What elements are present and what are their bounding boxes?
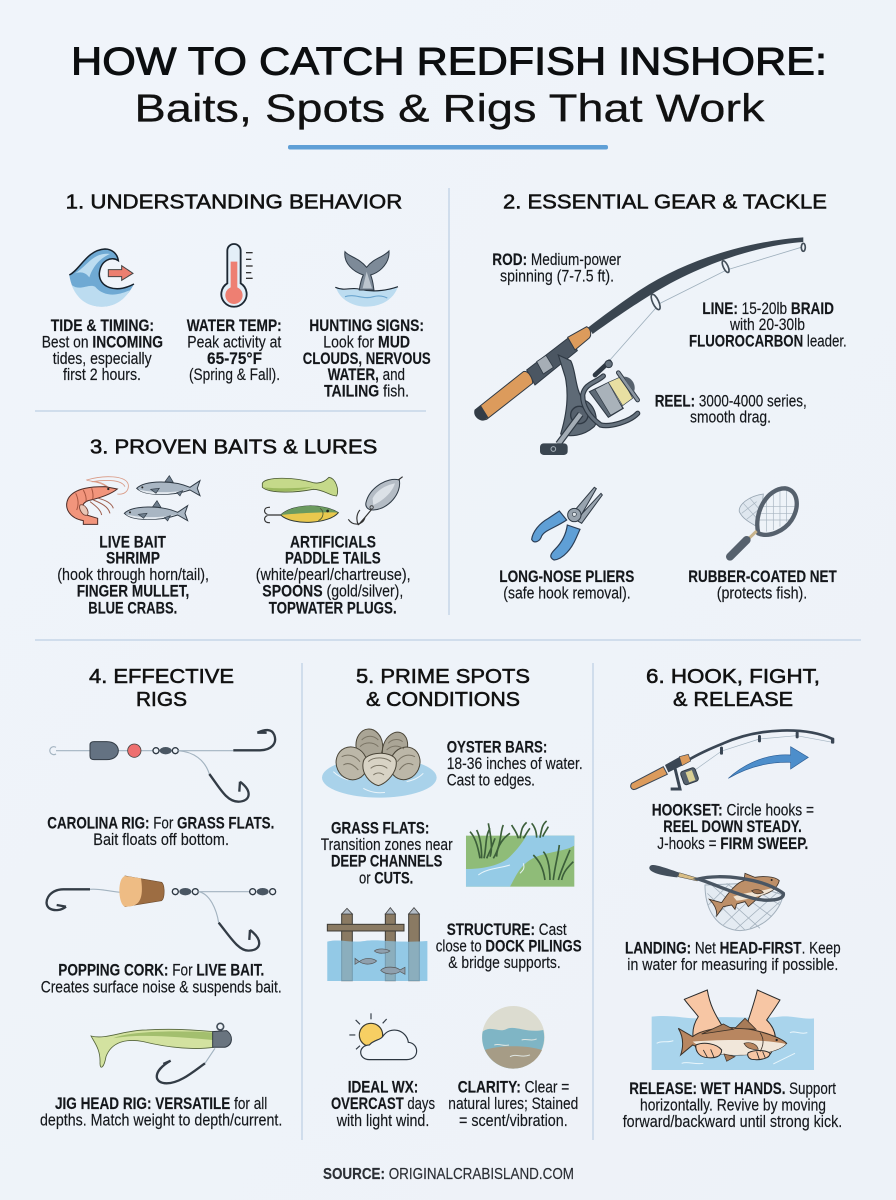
icon: rod and reel xyxy=(475,237,805,455)
icon: water clarity xyxy=(482,1006,545,1069)
icon: jig head rig xyxy=(91,1023,231,1083)
panel: 1 understanding behavior xyxy=(42,191,431,401)
text: jig head rig: JIG HEAD RIG: VERSATILE for all xyxy=(55,1095,267,1113)
text: popping cork: Creates surface noise & suspends bait. xyxy=(41,979,282,997)
text: pliers: (safe hook removal). xyxy=(503,584,631,602)
heading 4 xyxy=(89,666,234,711)
text: ideal wx xyxy=(331,1079,435,1130)
text: hookset: REEL DOWN STEADY. xyxy=(663,818,802,836)
label: line: LINE: 15-20lb BRAID xyxy=(702,300,834,318)
text: hookset: J-hooks = FIRM SWEEP. xyxy=(657,835,808,853)
heading 5: 5. PRIME SPOTS xyxy=(356,666,530,688)
text: water temp: 65-75°F xyxy=(207,350,262,368)
text: water temp: WATER TEMP: xyxy=(187,317,282,335)
icon: tailing fish xyxy=(335,251,398,307)
title: Baits, Spots & Rigs That Work xyxy=(134,88,765,130)
text: clarity: natural lures; Stained xyxy=(448,1095,578,1113)
text: live bait: FINGER MULLET, xyxy=(77,583,189,601)
text: hookset xyxy=(652,802,814,853)
text: ideal wx: IDEAL WX: xyxy=(348,1079,418,1097)
text: hunting signs: WATER, and xyxy=(328,366,405,384)
heading 5 xyxy=(356,666,530,711)
icon: carolina rig xyxy=(50,730,275,802)
text: artificials: PADDLE TAILS xyxy=(285,549,381,567)
text: carolina rig: CAROLINA RIG: For GRASS FLATS. xyxy=(47,814,274,832)
icon: hookset rod and arrow xyxy=(631,730,834,790)
text: grass flats xyxy=(321,819,453,887)
text: live bait: SHRIMP xyxy=(106,549,160,567)
text: oyster bars xyxy=(447,739,583,790)
heading 5: & CONDITIONS xyxy=(366,689,520,711)
text: live bait: LIVE BAIT xyxy=(99,533,166,551)
heading 2: 2. ESSENTIAL GEAR & TACKLE xyxy=(503,191,827,213)
panel: 2 essential gear and tackle xyxy=(475,191,847,602)
panel: 4 effective rigs xyxy=(40,666,282,1130)
heading 4: RIGS xyxy=(136,689,187,711)
text: hunting signs: CLOUDS, NERVOUS xyxy=(303,350,431,368)
title xyxy=(71,40,827,130)
text: clarity xyxy=(448,1079,578,1130)
text: structure: close to DOCK PILINGS xyxy=(436,938,582,956)
source footer: SOURCE: ORIGINALCRABISLAND.COM xyxy=(323,1166,574,1183)
text: hunting signs: Look for MUD xyxy=(323,333,410,351)
text: tide and timing: TIDE & TIMING: xyxy=(51,317,154,335)
text: artificials: SPOONS (gold/silver), xyxy=(262,583,403,601)
icon: sun and cloud xyxy=(349,1013,417,1060)
text: artificials xyxy=(256,533,411,617)
icon: long-nose pliers xyxy=(532,487,602,560)
text: pliers: LONG-NOSE PLIERS xyxy=(499,568,634,586)
text: release: forward/backward until strong kick. xyxy=(623,1113,842,1131)
text: release: RELEASE: WET HANDS. Support xyxy=(629,1080,836,1098)
text: release: horizontally. Revive by moving xyxy=(640,1097,826,1115)
text: jig head rig xyxy=(40,1095,282,1130)
reel xyxy=(540,355,638,455)
text: release xyxy=(623,1080,842,1131)
text: oyster bars: Cast to edges. xyxy=(447,772,535,790)
text: pliers xyxy=(499,568,634,602)
label: rod xyxy=(492,251,621,286)
text: hookset: HOOKSET: Circle hooks = xyxy=(652,802,814,820)
text: live bait: BLUE CRABS. xyxy=(88,599,177,617)
text: water temp xyxy=(187,317,282,384)
heading 4: 4. EFFECTIVE xyxy=(89,666,234,688)
text: artificials: ARTIFICIALS xyxy=(290,533,376,551)
text: ideal wx: OVERCAST days xyxy=(331,1095,435,1113)
text: live bait: (hook through horn/tail), xyxy=(57,566,209,584)
text: structure: & bridge supports. xyxy=(448,954,561,972)
text: popping cork xyxy=(41,962,282,997)
heading 3: 3. PROVEN BAITS & LURES xyxy=(90,436,377,458)
heading 6: & RELEASE xyxy=(673,689,793,711)
title: HOW TO CATCH REDFISH INSHORE: xyxy=(71,40,827,84)
label: line xyxy=(689,300,847,351)
icon: landing net with fish xyxy=(649,865,783,931)
icon: rubber-coated net xyxy=(730,488,797,557)
icon: oyster bar xyxy=(322,728,437,798)
text: live bait xyxy=(57,533,209,617)
text: grass flats: Transition zones near xyxy=(321,836,453,854)
heading 1: 1. UNDERSTANDING BEHAVIOR xyxy=(66,191,402,213)
text: tide and timing: Best on INCOMING xyxy=(42,333,163,351)
text: net: (protects fish). xyxy=(717,584,807,602)
text: hunting signs: HUNTING SIGNS: xyxy=(309,317,424,335)
icon: grass flats xyxy=(466,821,574,887)
label: reel: smooth drag. xyxy=(690,409,771,427)
text: tide and timing: tides, especially xyxy=(53,350,152,368)
text: grass flats: GRASS FLATS: xyxy=(331,819,429,837)
text: carolina rig xyxy=(47,814,274,849)
icon: artificial lures xyxy=(262,477,403,525)
text: water temp: Peak activity at xyxy=(187,333,282,351)
icon: shrimp and mullet xyxy=(67,476,200,524)
icon: release fish in water xyxy=(652,990,814,1070)
text: grass flats: or CUTS. xyxy=(359,869,413,887)
panel: 5 prime spots and conditions xyxy=(321,666,583,1130)
icon: thermometer xyxy=(221,244,253,307)
label: rod: ROD: Medium-power xyxy=(492,251,621,269)
text: artificials: TOPWATER PLUGS. xyxy=(269,599,397,617)
text: net: RUBBER-COATED NET xyxy=(688,568,837,586)
icon: popping cork xyxy=(47,876,276,951)
text: hunting signs xyxy=(303,317,431,401)
label: reel xyxy=(655,393,807,427)
text: popping cork: POPPING CORK: For LIVE BAIT. xyxy=(58,962,264,980)
text: ideal wx: with light wind. xyxy=(336,1112,429,1130)
text: net xyxy=(688,568,837,602)
text: tide and timing xyxy=(42,317,163,384)
text: clarity: = scent/vibration. xyxy=(459,1112,568,1130)
text: oyster bars: OYSTER BARS: xyxy=(447,739,547,757)
label: line: with 20-30lb xyxy=(729,316,805,334)
text: structure: STRUCTURE: Cast xyxy=(447,921,567,939)
icon: dock pilings xyxy=(327,908,427,981)
label: reel: REEL: 3000-4000 series, xyxy=(655,393,807,411)
text: tide and timing: first 2 hours. xyxy=(63,366,141,384)
panel: 6 hook, fight and release xyxy=(623,666,842,1131)
label: line: FLUOROCARBON leader. xyxy=(689,333,847,351)
panel: 3 proven baits and lures xyxy=(57,436,411,617)
heading 6: 6. HOOK, FIGHT, xyxy=(646,666,820,688)
text: clarity: CLARITY: Clear = xyxy=(458,1079,569,1097)
text: jig head rig: depths. Match weight to depth/current. xyxy=(40,1112,282,1130)
text: landing: in water for measuring if possible. xyxy=(627,956,838,974)
title underline xyxy=(288,145,608,150)
text: hunting signs: TAILING fish. xyxy=(324,383,409,401)
heading 6 xyxy=(646,666,820,711)
text: grass flats: DEEP CHANNELS xyxy=(331,853,442,871)
text: carolina rig: Bait floats off bottom. xyxy=(93,831,229,849)
icon: tide wave xyxy=(69,249,134,307)
text: water temp: (Spring & Fall). xyxy=(189,366,280,384)
text: artificials: (white/pearl/chartreuse), xyxy=(256,566,411,584)
text: landing: LANDING: Net HEAD-FIRST. Keep xyxy=(625,939,841,957)
label: rod: spinning (7-7.5 ft). xyxy=(500,268,614,286)
text: landing xyxy=(625,939,841,974)
text: oyster bars: 18-36 inches of water. xyxy=(447,755,583,773)
text: structure xyxy=(436,921,582,972)
